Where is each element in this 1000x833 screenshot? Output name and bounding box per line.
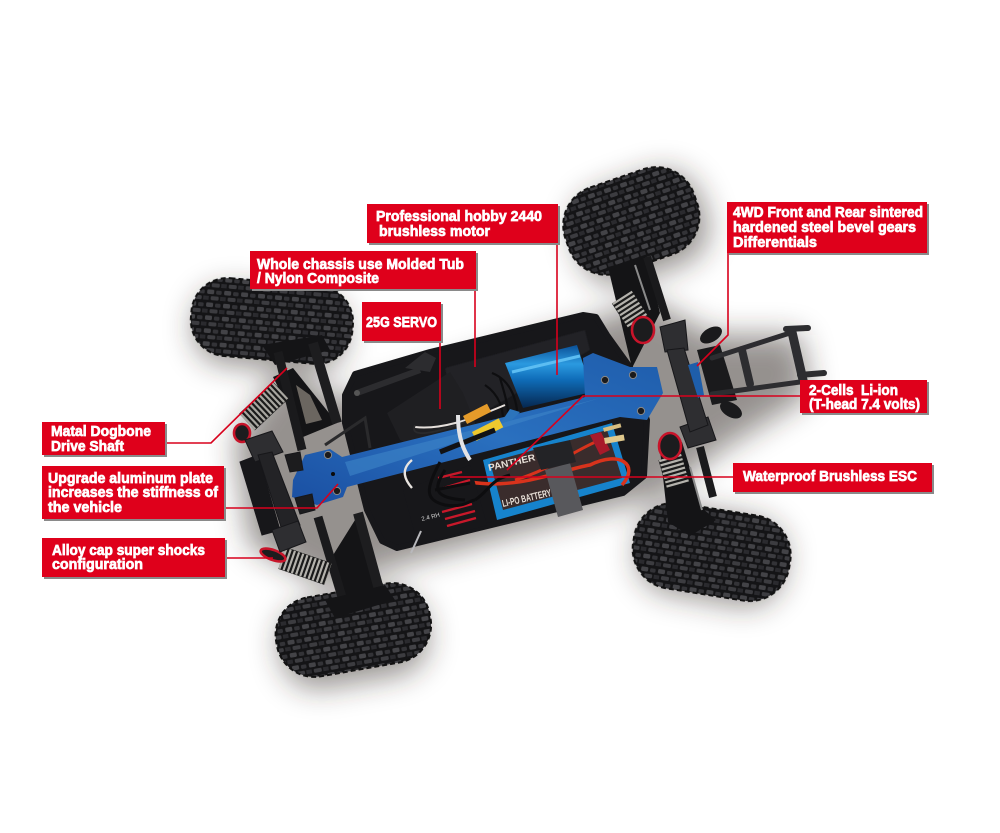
callout: servo [362,302,443,343]
brushless ESC with heat sink [403,465,487,553]
leader line: dogbone drive shaft [165,368,287,443]
shock red alloy caps [234,317,681,564]
callout: ESC: Waterproof Brushless ESC [743,469,917,485]
callout: differentials [727,202,929,255]
leader line: molded tub [474,289,476,367]
front bulkhead and blocks [660,320,716,448]
shock springs [247,297,678,574]
leader line: servo [439,341,441,409]
rear bulkhead and blocks [240,431,315,552]
callout: dogbone drive shaft: Drive Shaft [51,439,124,455]
LiPo battery: PANTHER [487,452,537,474]
callout: aluminum plate: Upgrade aluminum plate [48,471,213,487]
callout: ESC [733,463,934,494]
callout: aluminum plate [42,466,226,521]
leader line: alloy shocks [225,557,273,559]
callout: battery: 2-Cells Li-ion [809,383,898,399]
callout: molded tub chassis: Whole chassis use Molded Tub [257,257,464,273]
motor wires [485,373,518,430]
rear steering link [325,418,370,448]
callout: alloy shocks [42,538,227,579]
tire: front right upper [552,156,710,286]
LiPo battery: LI-PO BATTERY [501,488,553,510]
brushless motor [505,345,592,408]
callout: brushless motor [367,204,560,245]
tire: rear left upper [188,275,356,367]
leader line: ESC [450,476,733,478]
bundled ESC wires and connectors [405,404,510,506]
tire: rear left lower [270,577,437,683]
callout: aluminum plate: the vehicle [48,500,122,516]
leader line: battery [507,396,800,470]
callout: alloy shocks: configuration [52,557,143,573]
callout: differentials: Differentials [733,235,817,251]
vehicle chassis photo illustration [165,156,824,683]
callout: molded tub chassis [250,251,478,291]
callout: dogbone drive shaft [42,422,167,457]
callout: aluminum plate: increases the stiffness of [48,485,218,501]
callout: differentials: 4WD Front and Rear sintered [733,205,923,221]
molded tub chassis [345,315,647,548]
tire: front right lower [627,497,796,607]
callout: brushless motor: brushless motor [379,224,490,240]
leader line: aluminum plate [224,484,338,508]
callout: battery [800,380,929,415]
callout: servo: 25G SERVO [366,315,437,331]
callout: dogbone drive shaft: Matal Dogbone [51,424,151,440]
callout: differentials: hardened steel bevel gears [733,220,916,236]
callout: battery: (T-head 7.4 volts) [809,397,920,413]
callout: brushless motor: Professional hobby 2440 [376,209,542,225]
steering servo [354,352,478,446]
tub inner foam area [445,330,590,420]
front differential housing [697,323,745,422]
LiPo battery [483,423,630,520]
brushless ESC with heat sink: 2.4 RH [421,513,441,523]
leader line: motor [556,243,558,375]
callout: molded tub chassis: / Nylon Composite [257,271,379,287]
red battery wires and T plug [470,423,629,485]
callout: alloy shocks: Alloy cap super shocks [52,543,205,559]
drop shadow under vehicle [191,160,810,694]
leader line: differentials [697,253,728,366]
suspension arms [262,257,716,618]
velcro battery strap [533,440,583,517]
aluminum plate [292,353,663,505]
front bumper wing [712,328,824,394]
